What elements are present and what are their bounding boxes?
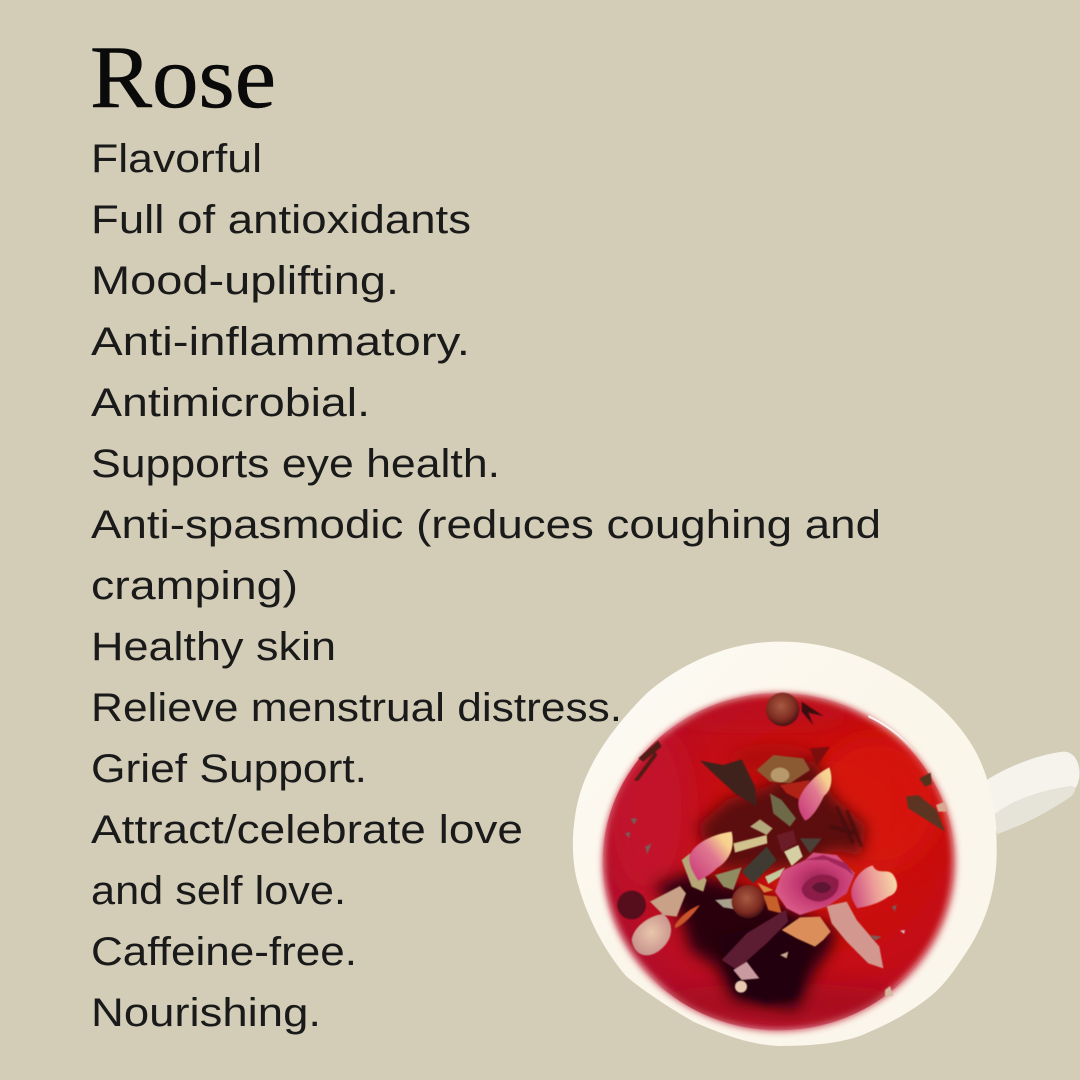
rose buds lower left	[617, 886, 700, 955]
dark streaks right of centre	[830, 807, 862, 847]
left rose petal	[689, 832, 733, 881]
benefits list	[91, 137, 881, 1035]
dark steeped herbs	[653, 757, 867, 1010]
list item: Antimicrobial.	[91, 381, 370, 425]
dark leaf upper	[700, 759, 757, 807]
herb sticks left	[634, 741, 662, 781]
list item: Caffeine-free.	[91, 930, 357, 974]
list item: Anti-spasmodic (reduces coughing and	[91, 503, 881, 547]
orange petal	[782, 917, 831, 947]
berry centre	[732, 885, 782, 918]
rose bud	[775, 853, 855, 915]
red herb mass	[780, 780, 810, 800]
list item: Attract/celebrate love	[91, 808, 523, 852]
floating berry at top	[766, 693, 823, 726]
pale fragment lower	[733, 962, 759, 980]
list item: Healthy skin	[91, 625, 336, 669]
glare on tea edge	[868, 715, 917, 753]
small bud fragment	[735, 981, 747, 993]
upper rose petal	[798, 767, 831, 821]
right rose petal	[851, 865, 897, 908]
list item: Flavorful	[91, 137, 262, 181]
pale leaf pieces	[682, 793, 822, 909]
list item: Full of antioxidants	[91, 198, 471, 242]
title: Rose	[90, 29, 276, 127]
list item: Supports eye health.	[91, 442, 500, 486]
herb pieces right	[906, 773, 947, 832]
list item: Mood-uplifting.	[91, 259, 399, 303]
tea flecks	[625, 818, 905, 996]
tea edge halo	[602, 693, 957, 1033]
hanging pale petal	[827, 902, 883, 968]
list item: Nourishing.	[91, 991, 321, 1035]
list item continuation: cramping)	[91, 564, 298, 608]
tea colour variation	[603, 701, 940, 1023]
list item continuation: and self love.	[91, 869, 346, 913]
photo: cup of rose tea	[573, 642, 1080, 1046]
tea surface	[603, 695, 953, 1028]
dried bud top	[757, 747, 830, 783]
cup bowl	[573, 642, 997, 1046]
list item: Grief Support.	[91, 747, 367, 791]
list item: Relieve menstrual distress.	[91, 686, 622, 730]
cup handle	[986, 752, 1080, 834]
list item: Anti-inflammatory.	[91, 320, 470, 364]
dark hibiscus piece	[722, 909, 788, 970]
